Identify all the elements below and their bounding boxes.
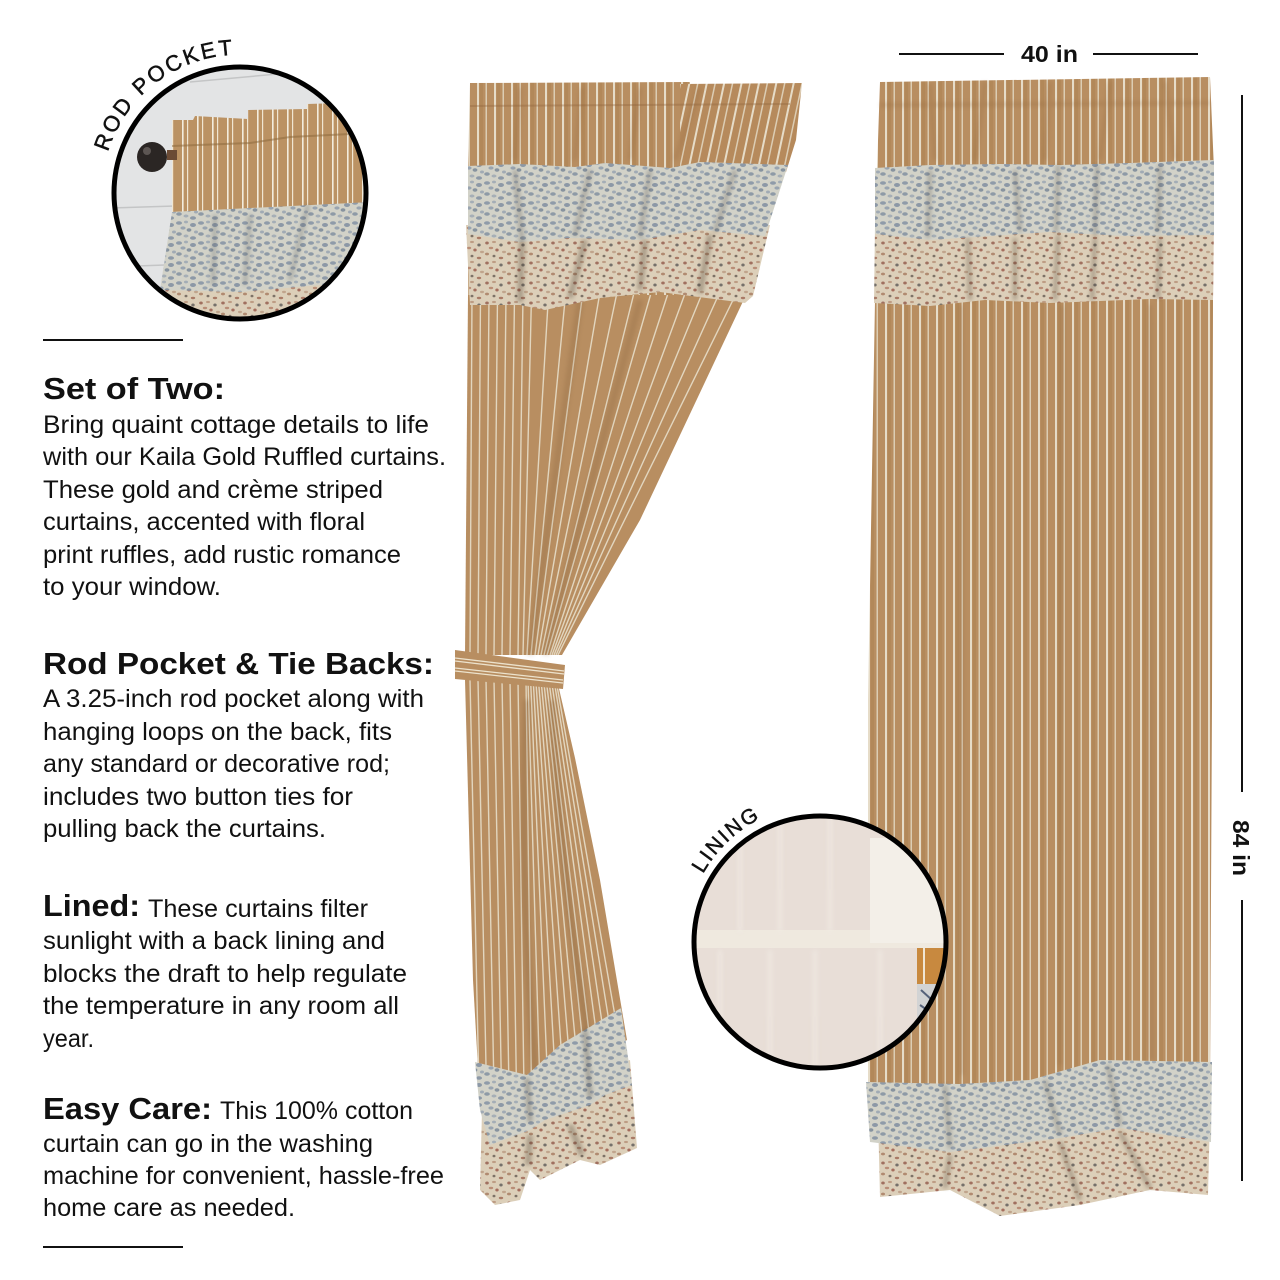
text block: set of two: These gold and crème striped	[43, 476, 383, 504]
top divider rule	[43, 339, 183, 341]
curtain header, rod pocket section	[468, 82, 802, 172]
right curtain top floral ruffles	[874, 160, 1214, 306]
text block: easy care: This 100% cotton	[220, 1097, 413, 1125]
text block: easy care	[43, 1091, 444, 1222]
upper floral ruffles	[466, 162, 788, 310]
label: lining: LINING	[691, 808, 758, 873]
text block: easy care: Easy Care:	[43, 1091, 212, 1126]
bottom divider rule	[43, 1246, 183, 1248]
text block: lined: sunlight with a back lining and	[43, 927, 385, 955]
curtain lower body below tie back	[465, 680, 628, 1090]
text block: lined	[43, 888, 407, 1053]
text block: rod pocket and tie backs: Rod Pocket & Tie Backs:	[43, 646, 434, 681]
panel: left curtain tied back	[455, 82, 802, 1205]
right curtain striped body	[868, 77, 1214, 1090]
text block: set of two: Bring quaint cottage details to life	[43, 411, 429, 439]
text block: set of two: Set of Two:	[43, 371, 225, 406]
text block: easy care: curtain can go in the washing	[43, 1130, 373, 1158]
curtain backing behind upper ruffles	[468, 225, 766, 300]
text block: set of two: to your window.	[43, 573, 221, 601]
curtain upper body with gathered stripes	[465, 295, 746, 655]
finial	[137, 142, 167, 172]
label: rod pocket: ROD POCKET	[94, 40, 232, 151]
height dimension: 84 in: 84 in	[1228, 820, 1254, 876]
icon: rod pocket detail circle	[110, 65, 370, 325]
panel: right curtain flat front view	[866, 77, 1214, 1216]
text block: lined: These curtains filter	[148, 895, 368, 923]
text block: rod pocket and tie backs: includes two button ties for	[43, 783, 353, 811]
text block: rod pocket and tie backs: A 3.25-inch rod pocket along with	[43, 685, 424, 713]
text block: rod pocket and tie backs: hanging loops on the back, fits	[43, 718, 392, 746]
width dimension: 40 in: 40 in	[1021, 41, 1078, 67]
text block: set of two: with our Kaila Gold Ruffled curtains.	[42, 443, 446, 471]
rod pocket gathers	[880, 82, 1210, 160]
lower floral ruffles	[475, 1008, 637, 1205]
text block: easy care: home care as needed.	[43, 1194, 295, 1222]
text block: set of two	[42, 371, 446, 601]
right curtain fold shadows	[961, 305, 1152, 1075]
text block: rod pocket and tie backs	[43, 646, 434, 843]
text block: easy care: machine for convenient, hassle-free	[43, 1162, 444, 1190]
text block: lined: the temperature in any room all	[43, 992, 399, 1020]
text block: set of two: print ruffles, add rustic romance	[43, 541, 401, 569]
text block: lined: Lined:	[43, 888, 140, 923]
text block: rod pocket and tie backs: any standard or decorative rod;	[43, 750, 390, 778]
text block: lined: blocks the draft to help regulate	[43, 960, 407, 988]
icon: lining detail circle	[690, 810, 950, 1080]
text block: rod pocket and tie backs: pulling back the curtains.	[43, 815, 326, 843]
text block: lined: year.	[43, 1025, 94, 1053]
text block: set of two: curtains, accented with floral	[43, 508, 365, 536]
tie back band	[455, 650, 565, 689]
right curtain bottom floral ruffles	[866, 1060, 1212, 1216]
